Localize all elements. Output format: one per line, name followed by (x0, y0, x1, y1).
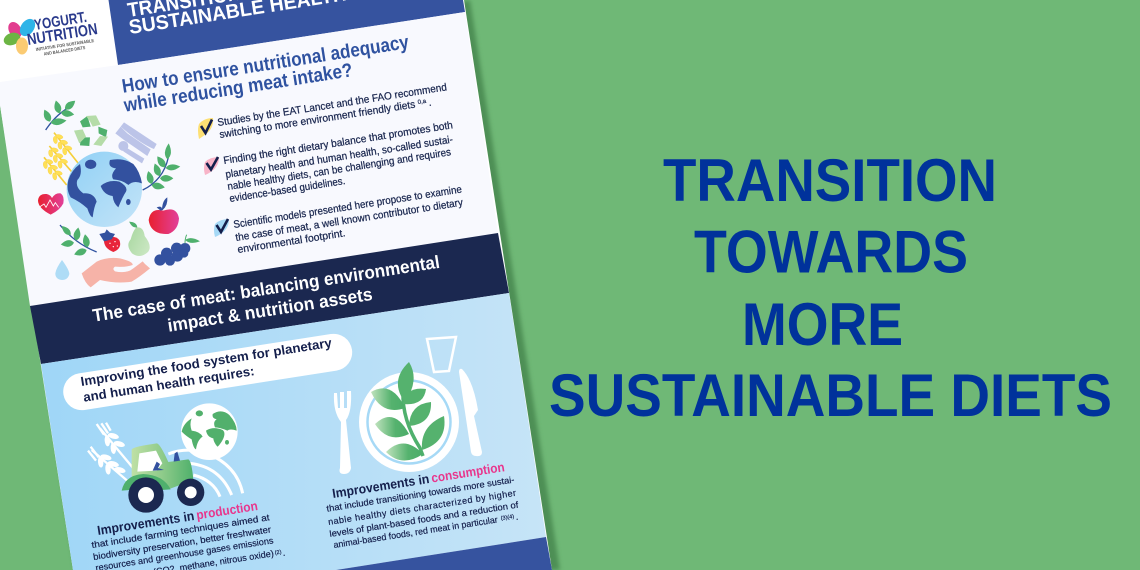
title: transition towards more sustainable diets: MORE (742, 291, 903, 358)
bullet 2 text: nable healthy diets, can be challenging and requires (227, 146, 452, 193)
title: transition towards more sustainable diets (549, 147, 1112, 429)
icon: right branch (143, 143, 181, 191)
heading: the case of meat: The case of meat: balancing environmental (91, 252, 441, 326)
icon: pear (128, 220, 150, 256)
icon: strawberry (99, 229, 120, 252)
text: improvements in consumption: that include transitioning towards more sustai- (326, 474, 515, 514)
bullet 1 text: 0,a (417, 99, 427, 106)
green globe (181, 403, 238, 460)
knife (459, 369, 482, 456)
bullet 2 text: planetary health and human health, so-called sustai- (225, 134, 454, 181)
panel: logo area (0, 0, 552, 570)
bullet 2 text: evidence-based guidelines. (229, 175, 346, 205)
panel: light blue section (41, 293, 546, 570)
white wheat (88, 423, 133, 482)
text: improvements in consumption: levels of plant-based foods and a reduction of (329, 500, 520, 539)
icon: pink check (204, 157, 219, 175)
text: improvements in consumption: . (515, 512, 519, 522)
callout: improving the food system: Improving the food system for planetary (80, 335, 334, 389)
callout: improving the food system: and human health requires: (82, 363, 255, 405)
icon: tractor, wheat and globe (88, 403, 243, 513)
icon: yellow check (198, 118, 213, 139)
logo wordmark: AND BALANCED DIETS (43, 45, 86, 56)
icon: apple (149, 197, 179, 234)
icon: blue check (214, 219, 229, 237)
text: improvements in consumption: animal-based foods, red meat in particular (333, 514, 498, 550)
bullet 1 text: switching to more environment friendly diets (219, 99, 416, 141)
logo wordmark (26, 9, 99, 56)
panel: dark band (30, 233, 509, 364)
logo (2, 9, 99, 56)
icon: cutlery (115, 122, 157, 163)
panel: tilted infographic sheet (0, 0, 552, 570)
icon: hand (82, 258, 150, 287)
bullet 3 text: the case of meat, a well known contributor to dietary (235, 197, 464, 244)
bullet 2 text (223, 119, 454, 205)
bullet 1 text: Studies by the EAT Lancet and the FAO recommend (217, 81, 448, 129)
logo wordmark: INITIATIVE FOR SUSTAINABLE (35, 38, 94, 52)
icon: globe (67, 152, 142, 227)
text: improvements in production: production (195, 498, 259, 522)
heading: how to ensure (120, 31, 410, 117)
text: improvements in production: that include farming techniques aimed at (91, 512, 271, 550)
heading: how to ensure: while reducing meat intake? (122, 59, 354, 117)
text: improvements in consumption: Improvements in (331, 471, 430, 501)
plate (359, 372, 459, 472)
text: improvements in production: . (282, 548, 286, 558)
bullet 3 text: Scientific models presented here propose to examine (233, 183, 463, 231)
panel: intro section (0, 12, 498, 306)
text: improvements in consumption: (3)(4) (500, 514, 515, 522)
icon: recycle (74, 115, 108, 146)
panel: header band (108, 0, 465, 65)
icon: grapes (154, 235, 200, 266)
tractor (122, 443, 204, 513)
text: improvements in consumption (326, 459, 520, 550)
illustration: planet and food (38, 98, 200, 287)
heading: how to ensure: How to ensure nutritional adequacy (120, 31, 410, 98)
icon: top branch (41, 98, 77, 130)
page shadow (6, 0, 560, 570)
fork (334, 391, 351, 474)
glass (427, 337, 456, 372)
bullet 3 text (233, 183, 464, 256)
text: improvements in production: biodiversity preservation, better freshwater (92, 524, 272, 562)
icon: wheat (43, 133, 78, 185)
icon: heart (38, 193, 64, 215)
title: transition towards more sustainable diets: TRANSITION (663, 147, 997, 214)
title: transition towards more sustainable diets: TOWARDS (694, 218, 968, 286)
bullet 1 text: . (428, 97, 432, 109)
bullet 3 text: environmental footprint. (237, 227, 346, 256)
heading: the case of meat: impact & nutrition assets (166, 284, 374, 336)
callout: improving the food system (61, 331, 355, 413)
text: improvements in consumption: consumption (430, 459, 506, 485)
text: improvements in production: Improvements in (96, 508, 195, 538)
logo wordmark: NUTRITION (26, 21, 99, 49)
logo wordmark: YOGURT. (33, 9, 88, 34)
icon: plate with plant, glass and cutlery (334, 337, 482, 474)
icon: water drop (55, 260, 69, 280)
plant (371, 362, 445, 461)
logo petals (2, 16, 38, 55)
panel: bottom blue band (336, 537, 552, 570)
icon: lower branch (60, 224, 97, 258)
text: improvements in production (91, 498, 286, 570)
text: improvements in consumption: nable healthy diets characterized by higher (327, 488, 517, 527)
text: improvements in production: (2) (274, 549, 282, 556)
white arcs (168, 450, 243, 497)
bullet 2 text: Finding the right dietary balance that promotes both (223, 119, 454, 167)
